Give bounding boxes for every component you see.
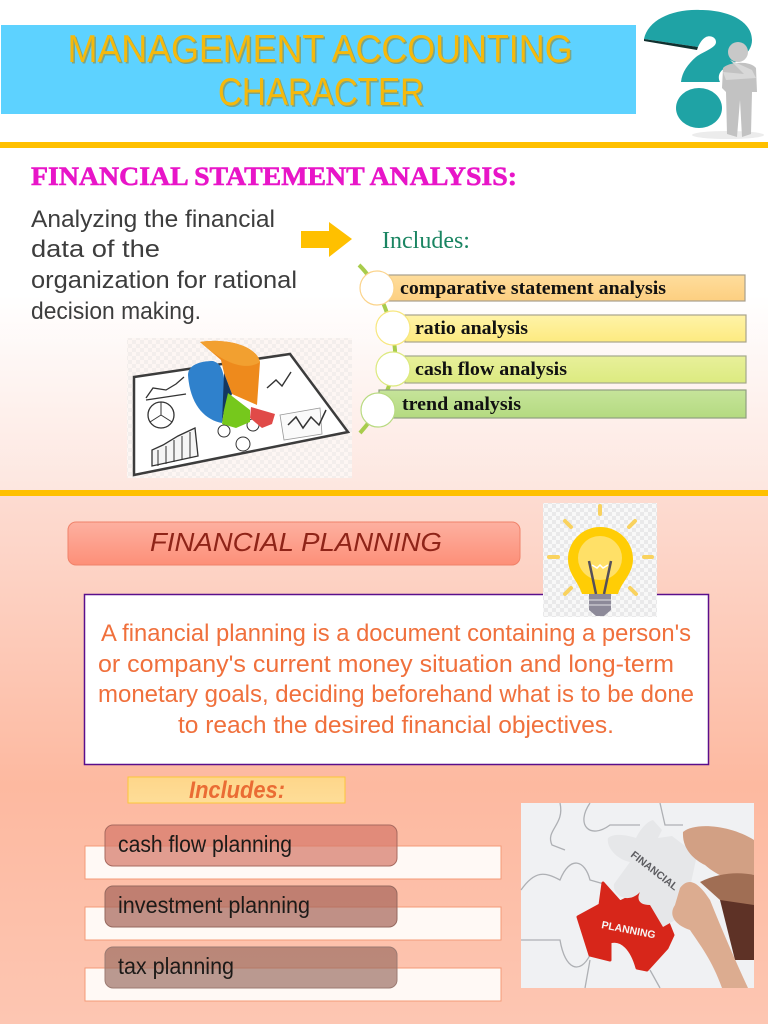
panel: financial planning definition: to reach the desired financial objectives. — [178, 712, 614, 739]
label: includes: Includes: — [382, 228, 470, 254]
page background top — [0, 0, 768, 492]
row: trend analysis: trend analysis — [402, 395, 521, 415]
divider bar: middle — [0, 490, 768, 496]
label: includes tag — [128, 777, 345, 804]
heading: financial planning — [68, 522, 520, 565]
icon: question mark with thinking figure — [644, 10, 764, 139]
divider bar: top — [0, 142, 768, 148]
title banner: CHARACTER — [218, 71, 424, 114]
illustration: puzzle piece and hand — [521, 803, 754, 988]
text block: analysis description: decision making. — [31, 298, 201, 325]
row: investment planning — [85, 886, 501, 940]
heading: financial planning: FINANCIAL PLANNING — [150, 527, 442, 557]
row: cash flow planning: cash flow planning — [118, 831, 292, 857]
title banner: CHARACTER — [220, 72, 426, 116]
row: ratio analysis — [376, 311, 746, 345]
title banner: MANAGEMENT ACCOUNTING — [69, 30, 574, 72]
text block: analysis description: Analyzing the financial — [31, 206, 275, 233]
text block: analysis description — [31, 206, 297, 325]
page background bottom — [0, 492, 768, 1024]
label: includes tag: Includes: — [189, 777, 285, 804]
arrow: to includes — [301, 222, 352, 257]
title banner: MANAGEMENT ACCOUNTING — [68, 28, 572, 71]
row: investment planning: investment planning — [118, 892, 310, 918]
row: cash flow planning — [85, 825, 501, 879]
row: ratio analysis: ratio analysis — [415, 319, 528, 339]
row: cash flow analysis: cash flow analysis — [415, 360, 567, 380]
illustration: puzzle piece and hand: PLANNING — [600, 919, 657, 941]
panel: financial planning definition: A financial planning is a document containing a person's — [101, 620, 691, 647]
illustration: charts on paper with 3D pie — [127, 338, 352, 478]
icon: light bulb — [543, 503, 657, 617]
panel: financial planning definition: monetary goals, deciding beforehand what is to be done — [98, 681, 694, 708]
list: analysis types — [359, 265, 746, 433]
text block: analysis description: data of the — [31, 236, 160, 263]
panel: financial planning definition — [84, 594, 708, 764]
row: comparative statement analysis: comparative statement analysis — [400, 279, 666, 299]
heading: financial statement analysis: FINANCIAL STATEMENT ANALYSIS: — [31, 162, 517, 191]
row: trend analysis — [361, 390, 746, 427]
row: tax planning: tax planning — [118, 953, 234, 979]
row: comparative statement analysis — [360, 271, 745, 305]
text block: analysis description: organization for rational — [31, 267, 297, 294]
row: cash flow analysis — [376, 352, 746, 386]
row: tax planning — [85, 947, 501, 1001]
title banner — [1, 25, 636, 116]
list: planning types — [85, 825, 501, 1001]
illustration: puzzle piece and hand: FINANCIAL — [628, 849, 681, 894]
panel: financial planning definition: or company's current money situation and long-term — [98, 651, 674, 678]
